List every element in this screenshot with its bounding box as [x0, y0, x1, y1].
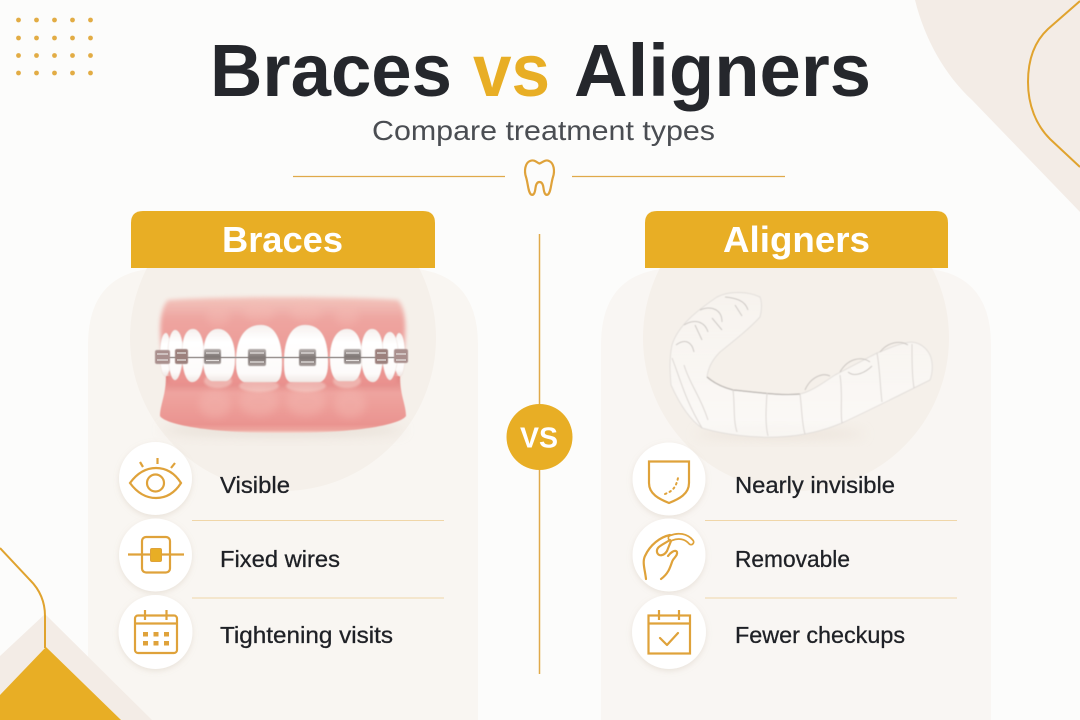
dot grid — [16, 18, 93, 75]
feature: removable — [632, 518, 850, 592]
title: vs — [473, 29, 550, 112]
upper teeth — [160, 325, 405, 382]
header: aligners: Aligners — [723, 219, 870, 260]
header: braces — [131, 211, 435, 268]
feature: tightening visits: Tightening visits — [220, 622, 393, 648]
row dividers: aligners — [705, 520, 957, 598]
feature list: braces — [118, 442, 444, 669]
decorative corner: top right — [915, 0, 1080, 212]
decorative corner: bottom left — [0, 548, 152, 720]
feature: tightening visits — [118, 595, 393, 669]
panel: aligners — [626, 211, 957, 678]
center divider line — [538, 234, 540, 674]
header: aligners — [645, 211, 948, 268]
illustration: teeth with braces — [155, 297, 408, 436]
image backdrop circle: aligners — [643, 268, 949, 491]
title — [210, 29, 871, 112]
feature: fixed wires: Fixed wires — [220, 546, 340, 572]
tooth dividers — [672, 344, 914, 436]
header: braces: Braces — [222, 219, 343, 260]
vs badge: VS — [520, 422, 558, 454]
panel background: braces — [88, 268, 478, 720]
panel: braces — [88, 185, 478, 720]
occlusal detail — [676, 297, 908, 390]
title: Aligners — [574, 29, 871, 112]
lower teeth hint — [204, 374, 361, 392]
feature: fixed wires — [119, 518, 340, 592]
feature: fewer checkups: Fewer checkups — [735, 622, 905, 648]
feature: removable: Removable — [735, 546, 850, 572]
feature: visible: Visible — [220, 472, 290, 498]
panel background: aligners — [601, 268, 991, 720]
title: Braces — [210, 29, 452, 112]
feature: nearly invisible — [632, 442, 895, 516]
image backdrop circle: braces — [146, 268, 420, 270]
vs badge — [506, 404, 572, 470]
feature: fewer checkups — [632, 595, 905, 669]
divider with tooth icon — [293, 160, 785, 195]
gum highlights — [199, 303, 366, 418]
feature: nearly invisible: Nearly invisible — [735, 472, 895, 498]
subtitle: Compare treatment types — [372, 115, 715, 146]
feature: visible — [119, 442, 290, 515]
row dividers: braces — [192, 520, 444, 598]
feature list: aligners — [632, 442, 957, 669]
brackets — [155, 349, 408, 366]
tray rim — [707, 377, 800, 395]
illustration: clear aligner tray — [670, 292, 932, 439]
